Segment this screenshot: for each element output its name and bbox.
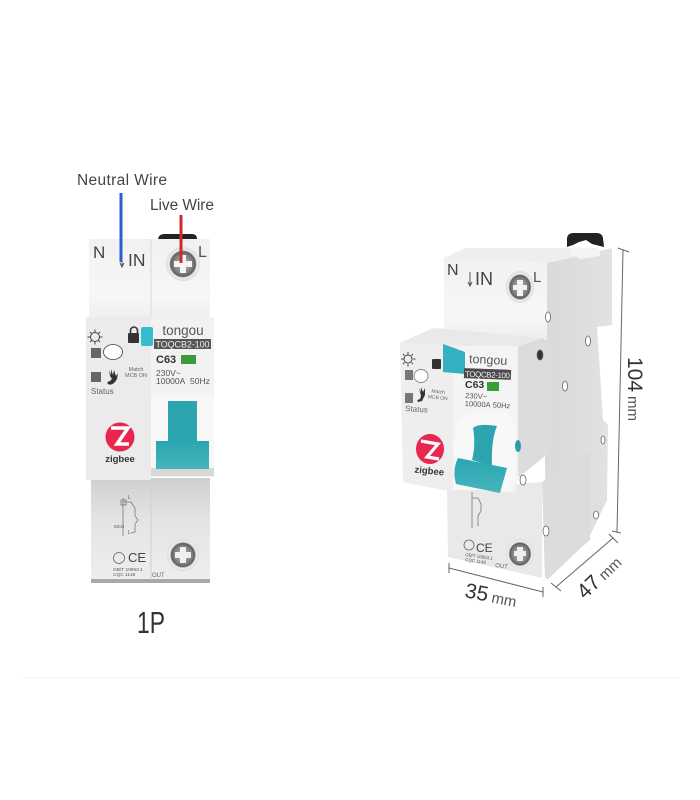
circuit diagram [472,492,481,528]
right breaker: perspective view [400,233,612,580]
left breaker: front view [86,234,214,583]
black rear clip [567,233,604,247]
teal button [141,327,153,346]
C63 rating: C63 [465,379,484,391]
certification marks [464,540,494,565]
dimension: height 104 mm [612,248,646,533]
circuit diagram: MCU [114,524,124,529]
match text: MCB ON [427,394,448,402]
status label: Status [91,387,114,396]
hand icon [417,387,425,402]
zigbee module front [400,343,463,492]
neutral wire label: Neutral Wire [77,172,167,189]
top face [444,248,598,263]
match MCB text: MCB ON [125,373,147,379]
zigbee logo [414,434,445,479]
green indicator [487,382,499,391]
upper screw [506,271,534,303]
1P label: 1P [137,605,165,640]
ratings: 10000A [465,399,491,409]
dimension: depth 47 mm: 47mm [572,551,626,604]
circuit diagram [114,495,138,536]
status square 2 [91,372,101,382]
lower screw [506,539,534,569]
breaker housing [151,317,214,477]
live wire [180,215,182,263]
upper front face [444,258,547,340]
green indicator [181,355,196,364]
status square 1 [405,370,413,380]
zigbee module top [400,328,543,346]
label IN: IN [475,269,493,289]
terminal label IN [120,250,146,270]
side face [543,248,612,580]
lower side shade [542,450,590,579]
ratings: 50Hz [493,400,511,410]
match MCB text: Match [129,367,143,373]
lower front face [447,482,542,578]
housing side [518,338,550,478]
dimension: height 104 mm: 104 mm [623,357,646,421]
white handle surround [453,412,515,490]
status sun icon [88,330,102,344]
circuit diagram: L [128,495,131,501]
zigbee logo: zigbee [105,454,135,465]
top white latch [570,247,600,259]
teal clip [443,344,465,374]
toggle handle [454,425,507,493]
zigbee module [86,317,151,480]
certification marks: GB/T 10963.1 [465,552,494,561]
status label: Status [405,404,428,415]
lower body [91,478,210,583]
OUT label: OUT [495,563,508,571]
terminal label L: L [198,244,207,261]
model bar: TOQCB2-100 [465,370,511,380]
lock icon [432,359,441,369]
voltage ratings: 50Hz [190,376,210,386]
tongou logo: tongou [469,352,508,368]
black top clip [158,234,197,239]
certification marks: CE [128,550,146,565]
toggle handle [156,401,209,469]
neutral wire [120,193,122,262]
circuit diagram: L [128,530,131,536]
zigbee logo [105,422,135,465]
match text: Match [431,389,445,396]
certification marks: GB/T 10963.1 [113,567,143,573]
dimension: width 35 mm [449,563,543,612]
label N: N [447,262,459,279]
ratings: 230V~ [465,391,488,401]
certification marks [113,550,146,578]
certification marks: CE [476,541,493,555]
model bar: TOQCB2-100 [156,340,210,350]
side holes [520,312,605,536]
hand icon [107,369,118,385]
top screw [166,247,200,281]
terminal label IN: IN [128,250,146,270]
status oval [414,370,428,382]
OUT label: OUT [152,573,165,579]
status square 2 [405,393,413,403]
upper terminal block [89,239,210,321]
tongou logo: tongou [162,323,204,338]
status oval button [104,344,122,360]
terminal label N: N [93,243,105,262]
certification marks: CQC 1148 [113,572,136,578]
housing front [453,345,518,493]
zigbee logo: zigbee [414,464,445,479]
status square 1 [91,348,101,358]
certification marks: CQC 1148 [465,557,487,565]
voltage ratings: 10000A [156,376,186,386]
C63 rating: C63 [156,354,176,366]
sun icon [401,352,416,366]
bottom screw [167,539,199,571]
voltage ratings: 230V~ [156,368,181,378]
lock icon [128,327,139,343]
teal dot [515,440,521,452]
label L: L [533,269,541,286]
dimension: width 35 mm: 35mm [463,579,519,612]
dimension: depth 47 mm [551,534,626,604]
live wire label: Live Wire [150,197,214,214]
